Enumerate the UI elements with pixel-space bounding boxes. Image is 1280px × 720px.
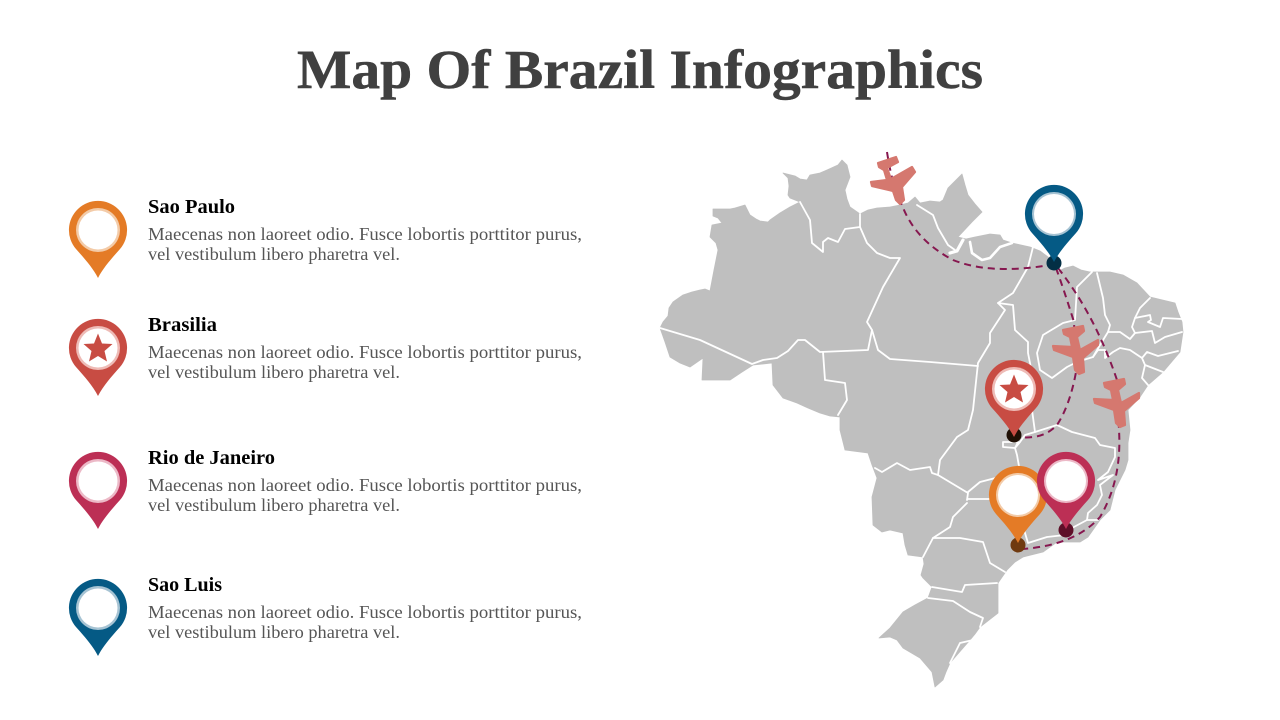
map of Brazil xyxy=(660,160,1183,687)
text block: Sao Paulo description: Maecenas non laoreet odio. Fusce lobortis porttitor purus, xyxy=(148,224,582,244)
icon: orange pin xyxy=(69,201,127,278)
map pin: Brasilia xyxy=(985,360,1043,442)
text block: Rio de Janeiro description: Maecenas non laoreet odio. Fusce lobortis porttitor purus, xyxy=(148,475,582,495)
text block: Sao Luis description: Maecenas non laoreet odio. Fusce lobortis porttitor purus, xyxy=(148,602,582,622)
icon: plane 3 xyxy=(1094,379,1139,427)
map pin: Sao Paulo xyxy=(989,466,1047,552)
icon: plane 1 xyxy=(871,157,915,204)
text block: Brasilia description: vel vestibulum libero pharetra vel. xyxy=(148,362,400,382)
heading: Rio de Janeiro: Rio de Janeiro xyxy=(148,447,275,469)
text block: Rio de Janeiro description xyxy=(148,475,582,515)
map pin: Rio de Janeiro xyxy=(1037,452,1095,538)
legend item: Rio de Janeiro xyxy=(69,447,582,529)
text block: Sao Paulo description: vel vestibulum libero pharetra vel. xyxy=(148,244,400,264)
map pin: Sao Luis xyxy=(1025,185,1083,270)
icon: plane 2 xyxy=(1053,326,1098,374)
heading: Sao Paulo: Sao Paulo xyxy=(148,196,235,218)
heading: Brasilia: Brasilia xyxy=(148,314,217,336)
country silhouette xyxy=(660,160,1183,687)
title: Map Of Brazil Infographics xyxy=(297,39,983,100)
legend item: Brasilia xyxy=(69,314,582,396)
text block: Rio de Janeiro description: vel vestibulum libero pharetra vel. xyxy=(148,495,400,515)
dashed route: northern arc xyxy=(887,152,1050,269)
legend item: Sao Paulo xyxy=(69,196,582,278)
dashed route: to Rio and Sao Paulo xyxy=(1023,268,1119,549)
text block: Sao Paulo description xyxy=(148,224,582,264)
legend item: Sao Luis xyxy=(69,574,582,656)
icon: blue pin xyxy=(69,579,127,656)
icon: crimson pin xyxy=(69,452,127,529)
text block: Sao Luis description: vel vestibulum libero pharetra vel. xyxy=(148,622,400,642)
text block: Brasilia description: Maecenas non laoreet odio. Fusce lobortis porttitor purus, xyxy=(148,342,582,362)
heading: Sao Luis: Sao Luis xyxy=(148,574,222,596)
text block: Sao Luis description xyxy=(148,602,582,642)
icon: red star pin xyxy=(69,319,127,396)
dashed route: via Brasilia xyxy=(1018,268,1076,438)
state borders xyxy=(660,202,1182,663)
text block: Brasilia description xyxy=(148,342,582,382)
